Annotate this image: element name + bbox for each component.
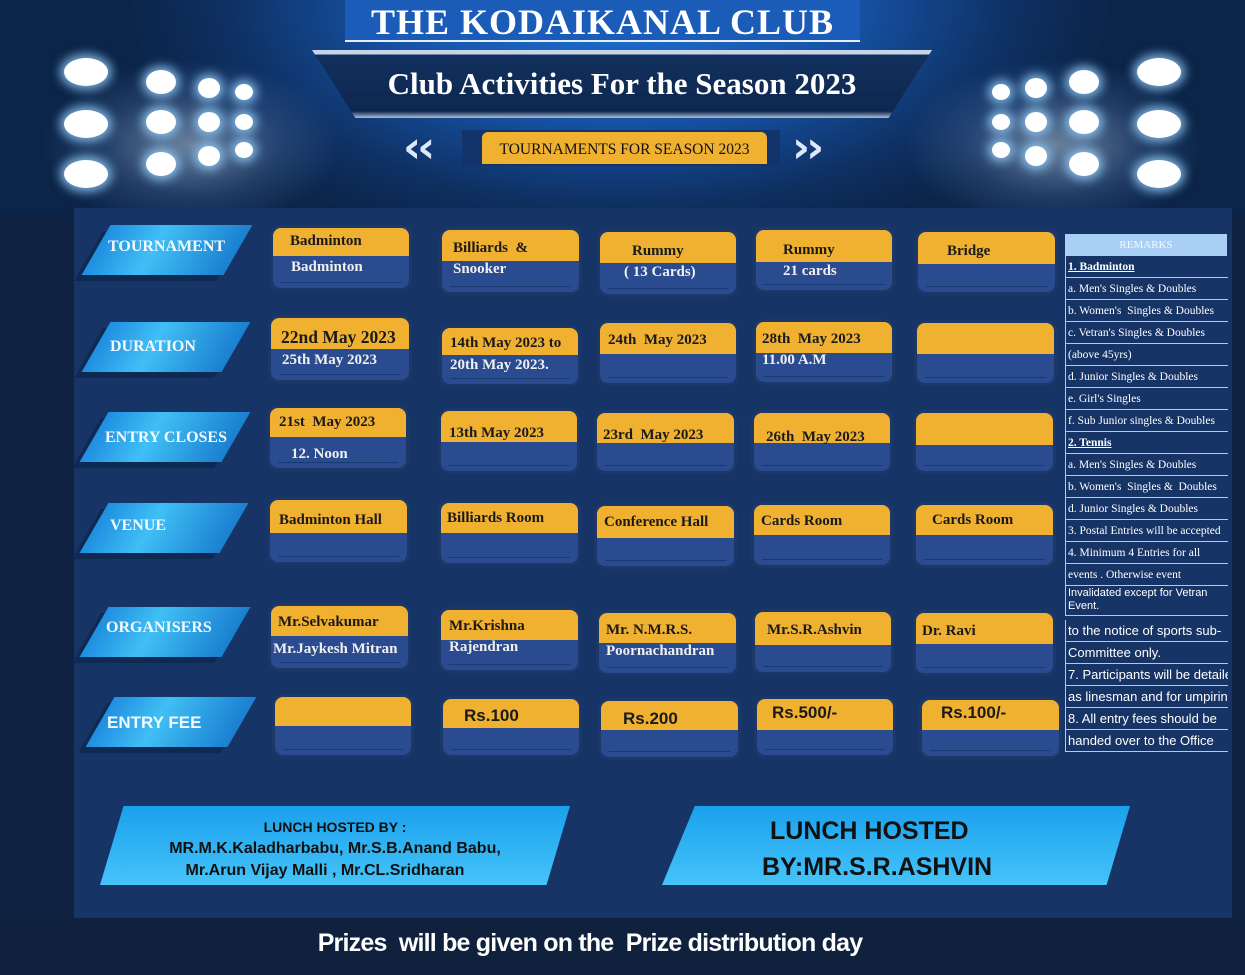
- arrows left: ‹‹: [403, 122, 431, 173]
- card: Poornachandran: [606, 643, 714, 659]
- card: Mr. N.M.R.S.: [606, 622, 692, 638]
- lunch banner left: LUNCH HOSTED BY :: [264, 819, 406, 835]
- arrows right: ››: [792, 122, 820, 173]
- card: billiards: [442, 230, 579, 292]
- card: badminton: Badminton: [290, 233, 362, 249]
- text: to the notice of sports sub-: [1068, 623, 1221, 638]
- text: b. Women's Singles & Doubles: [1068, 305, 1214, 317]
- lunch banner left: MR.M.K.Kaladharbabu, Mr.S.B.Anand Babu,: [169, 840, 501, 857]
- row: entry closes: [270, 408, 1053, 471]
- text: (above 45yrs): [1068, 349, 1132, 361]
- label: duration: DURATION: [110, 338, 196, 355]
- lunch banner right: [662, 806, 1130, 885]
- card: [271, 606, 408, 668]
- card: Conference Hall: [604, 514, 708, 530]
- remarks header: REMARKS: [1119, 239, 1173, 251]
- card: billiards: Billiards &: [453, 240, 528, 256]
- card: Rajendran: [449, 639, 518, 655]
- card: billiards: Snooker: [453, 261, 506, 277]
- text: c. Vetran's Singles & Doubles: [1068, 327, 1205, 339]
- text: d. Junior Singles & Doubles: [1068, 503, 1198, 515]
- card: rummy 21: Rummy: [783, 242, 835, 258]
- background header glow: [0, 0, 1245, 215]
- card: Dr. Ravi: [922, 623, 976, 639]
- subtitle banner: Club Activities For the Season 2023: [388, 66, 856, 101]
- card: [597, 506, 734, 566]
- card: Badminton Hall: [279, 512, 382, 528]
- card: [754, 505, 890, 565]
- card: 21st May 2023: [279, 414, 375, 430]
- footer strip: [0, 918, 1245, 975]
- card: 20th May 2023.: [450, 357, 549, 373]
- text: handed over to the Office: [1068, 733, 1214, 748]
- row: venue: [270, 500, 1053, 566]
- text: Committee only.: [1068, 645, 1161, 660]
- card: Mr.Krishna: [449, 618, 525, 634]
- card: bridge: Bridge: [947, 243, 990, 259]
- text: 4. Minimum 4 Entries for all: [1068, 547, 1200, 559]
- text: 8. All entry fees should be: [1068, 711, 1217, 726]
- card: 28th May 2023: [762, 331, 861, 347]
- card: 14th May 2023 to: [450, 335, 561, 351]
- card: [270, 500, 407, 562]
- card: rummy 13: ( 13 Cards): [624, 264, 696, 280]
- card: [275, 697, 411, 755]
- lunch banner right: BY:MR.S.R.ASHVIN: [762, 853, 992, 881]
- card: badminton: [273, 228, 409, 288]
- label: entry fee: [78, 697, 256, 753]
- card: [916, 505, 1053, 565]
- text: Invalidated except for Vetran: [1068, 587, 1207, 599]
- card: [442, 328, 578, 384]
- card: rummy 21: [756, 230, 892, 290]
- label: venue: [72, 503, 248, 559]
- card: Cards Room: [761, 513, 842, 529]
- text: Event.: [1068, 600, 1099, 612]
- card: [601, 701, 738, 757]
- text: e. Girl's Singles: [1068, 393, 1141, 405]
- label: entry closes: ENTRY CLOSES: [105, 429, 227, 446]
- card: [916, 413, 1053, 471]
- card: [757, 699, 893, 755]
- card: Cards Room: [932, 512, 1013, 528]
- card: [755, 612, 891, 672]
- row: tournament: [273, 228, 1055, 294]
- lunch banner right: LUNCH HOSTED: [770, 817, 969, 845]
- card: 22nd May 2023: [281, 327, 396, 347]
- card: [922, 700, 1059, 756]
- card: [597, 413, 734, 471]
- card: Billiards Room: [447, 510, 544, 526]
- footer text: Prizes will be given on the Prize distribution day: [318, 929, 862, 957]
- card: [441, 411, 577, 471]
- row: organisers: [271, 606, 1053, 673]
- card: Mr.Selvakumar: [278, 614, 379, 630]
- card: [271, 318, 409, 380]
- text: d. Junior Singles & Doubles: [1068, 371, 1198, 383]
- card: badminton: Badminton: [291, 259, 363, 275]
- card: Rs.500/-: [772, 703, 837, 722]
- label: organisers: ORGANISERS: [106, 619, 212, 636]
- card: [441, 610, 578, 670]
- row: entry fee: [275, 697, 1059, 757]
- card: Mr.S.R.Ashvin: [767, 622, 862, 638]
- card: [754, 413, 890, 471]
- text: 2. Tennis: [1068, 437, 1111, 449]
- lunch banner left: [100, 806, 570, 885]
- tournaments tab: [462, 130, 780, 166]
- card: 13th May 2023: [449, 425, 544, 441]
- card: 26th May 2023: [766, 429, 865, 445]
- card: [916, 613, 1053, 673]
- card: Rs.100: [464, 706, 519, 725]
- card: bridge: [918, 232, 1055, 292]
- remarks header: [1065, 234, 1227, 256]
- main panel: [74, 208, 1232, 918]
- card: Mr.Jaykesh Mitran: [273, 641, 397, 657]
- text: a. Men's Singles & Doubles: [1068, 459, 1196, 471]
- subtitle banner: [312, 50, 932, 118]
- label: tournament: [74, 225, 252, 281]
- title: THE KODAIKANAL CLUB: [371, 2, 834, 42]
- card: 24th May 2023: [608, 332, 707, 348]
- label: tournament: TOURNAMENT: [108, 238, 225, 255]
- card: [443, 699, 579, 755]
- card: 23rd May 2023: [603, 427, 703, 443]
- label: organisers: [72, 607, 250, 663]
- text: 3. Postal Entries will be accepted: [1068, 525, 1221, 537]
- text: 1. Badminton: [1068, 261, 1134, 273]
- card: 12. Noon: [291, 446, 348, 462]
- card: rummy 13: [600, 232, 736, 294]
- card: [917, 323, 1054, 383]
- card: 11.00 A.M: [762, 352, 827, 368]
- label: entry fee: ENTRY FEE: [107, 713, 201, 732]
- text: f. Sub Junior singles & Doubles: [1068, 415, 1215, 427]
- label: venue: VENUE: [110, 517, 166, 534]
- row: duration: [271, 318, 1054, 384]
- card: Rs.200: [623, 709, 678, 728]
- text: a. Men's Singles & Doubles: [1068, 283, 1196, 295]
- tournaments tab: TOURNAMENTS FOR SEASON 2023: [500, 141, 749, 158]
- card: rummy 13: Rummy: [632, 243, 684, 259]
- card: [599, 613, 736, 673]
- text: events . Otherwise event: [1068, 569, 1181, 581]
- label: duration: [74, 322, 250, 378]
- label: entry closes: [72, 412, 250, 468]
- lunch banner left: Mr.Arun Vijay Malli , Mr.CL.Sridharan: [186, 862, 464, 879]
- card: [441, 503, 578, 563]
- spotlights right: [924, 47, 1193, 208]
- card: 25th May 2023: [282, 352, 377, 368]
- card: [756, 322, 892, 382]
- card: Rs.100/-: [941, 703, 1006, 722]
- card: rummy 21: 21 cards: [783, 263, 837, 279]
- spotlights left: [52, 47, 321, 208]
- card: [270, 408, 406, 468]
- card: [600, 323, 736, 383]
- text: b. Women's Singles & Doubles: [1068, 481, 1217, 493]
